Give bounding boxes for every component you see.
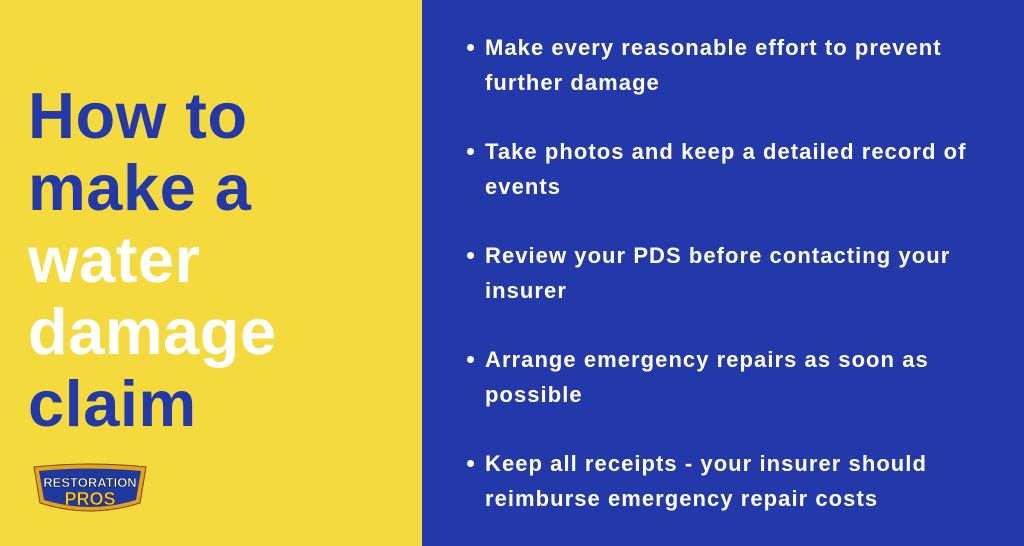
bullet 5: reimburse emergency repair costs — [485, 486, 878, 511]
bullet 2 — [485, 134, 1015, 204]
bullet 3 — [485, 238, 1015, 308]
bullet 1 — [485, 30, 1015, 100]
logo: Restoration Pros — [33, 464, 147, 512]
bullet 1: further damage — [485, 70, 660, 95]
bullet 5 — [485, 446, 1015, 516]
bullet 3: insurer — [485, 278, 567, 303]
title: claim — [28, 367, 197, 440]
panel: right blue — [422, 0, 1024, 546]
bullet 1: Make every reasonable effort to prevent — [485, 35, 942, 60]
bullet 2: Take photos and keep a detailed record of — [485, 139, 967, 164]
title: water — [28, 223, 200, 296]
logo: Restoration Pros: RESTORATION — [43, 475, 137, 490]
title: How to — [28, 79, 248, 152]
title: damage — [28, 295, 277, 368]
bullet 4 — [485, 342, 1015, 412]
bullet 4: possible — [485, 382, 583, 407]
bullet 2: events — [485, 174, 561, 199]
logo: Restoration Pros: PROS — [64, 489, 116, 509]
title — [28, 79, 277, 440]
bullet 4: Arrange emergency repairs as soon as — [485, 347, 929, 372]
title: make a — [28, 151, 251, 224]
bullet 3: Review your PDS before contacting your — [485, 243, 950, 268]
panel: left yellow — [0, 0, 422, 546]
bullet 5: Keep all receipts - your insurer should — [485, 451, 927, 476]
